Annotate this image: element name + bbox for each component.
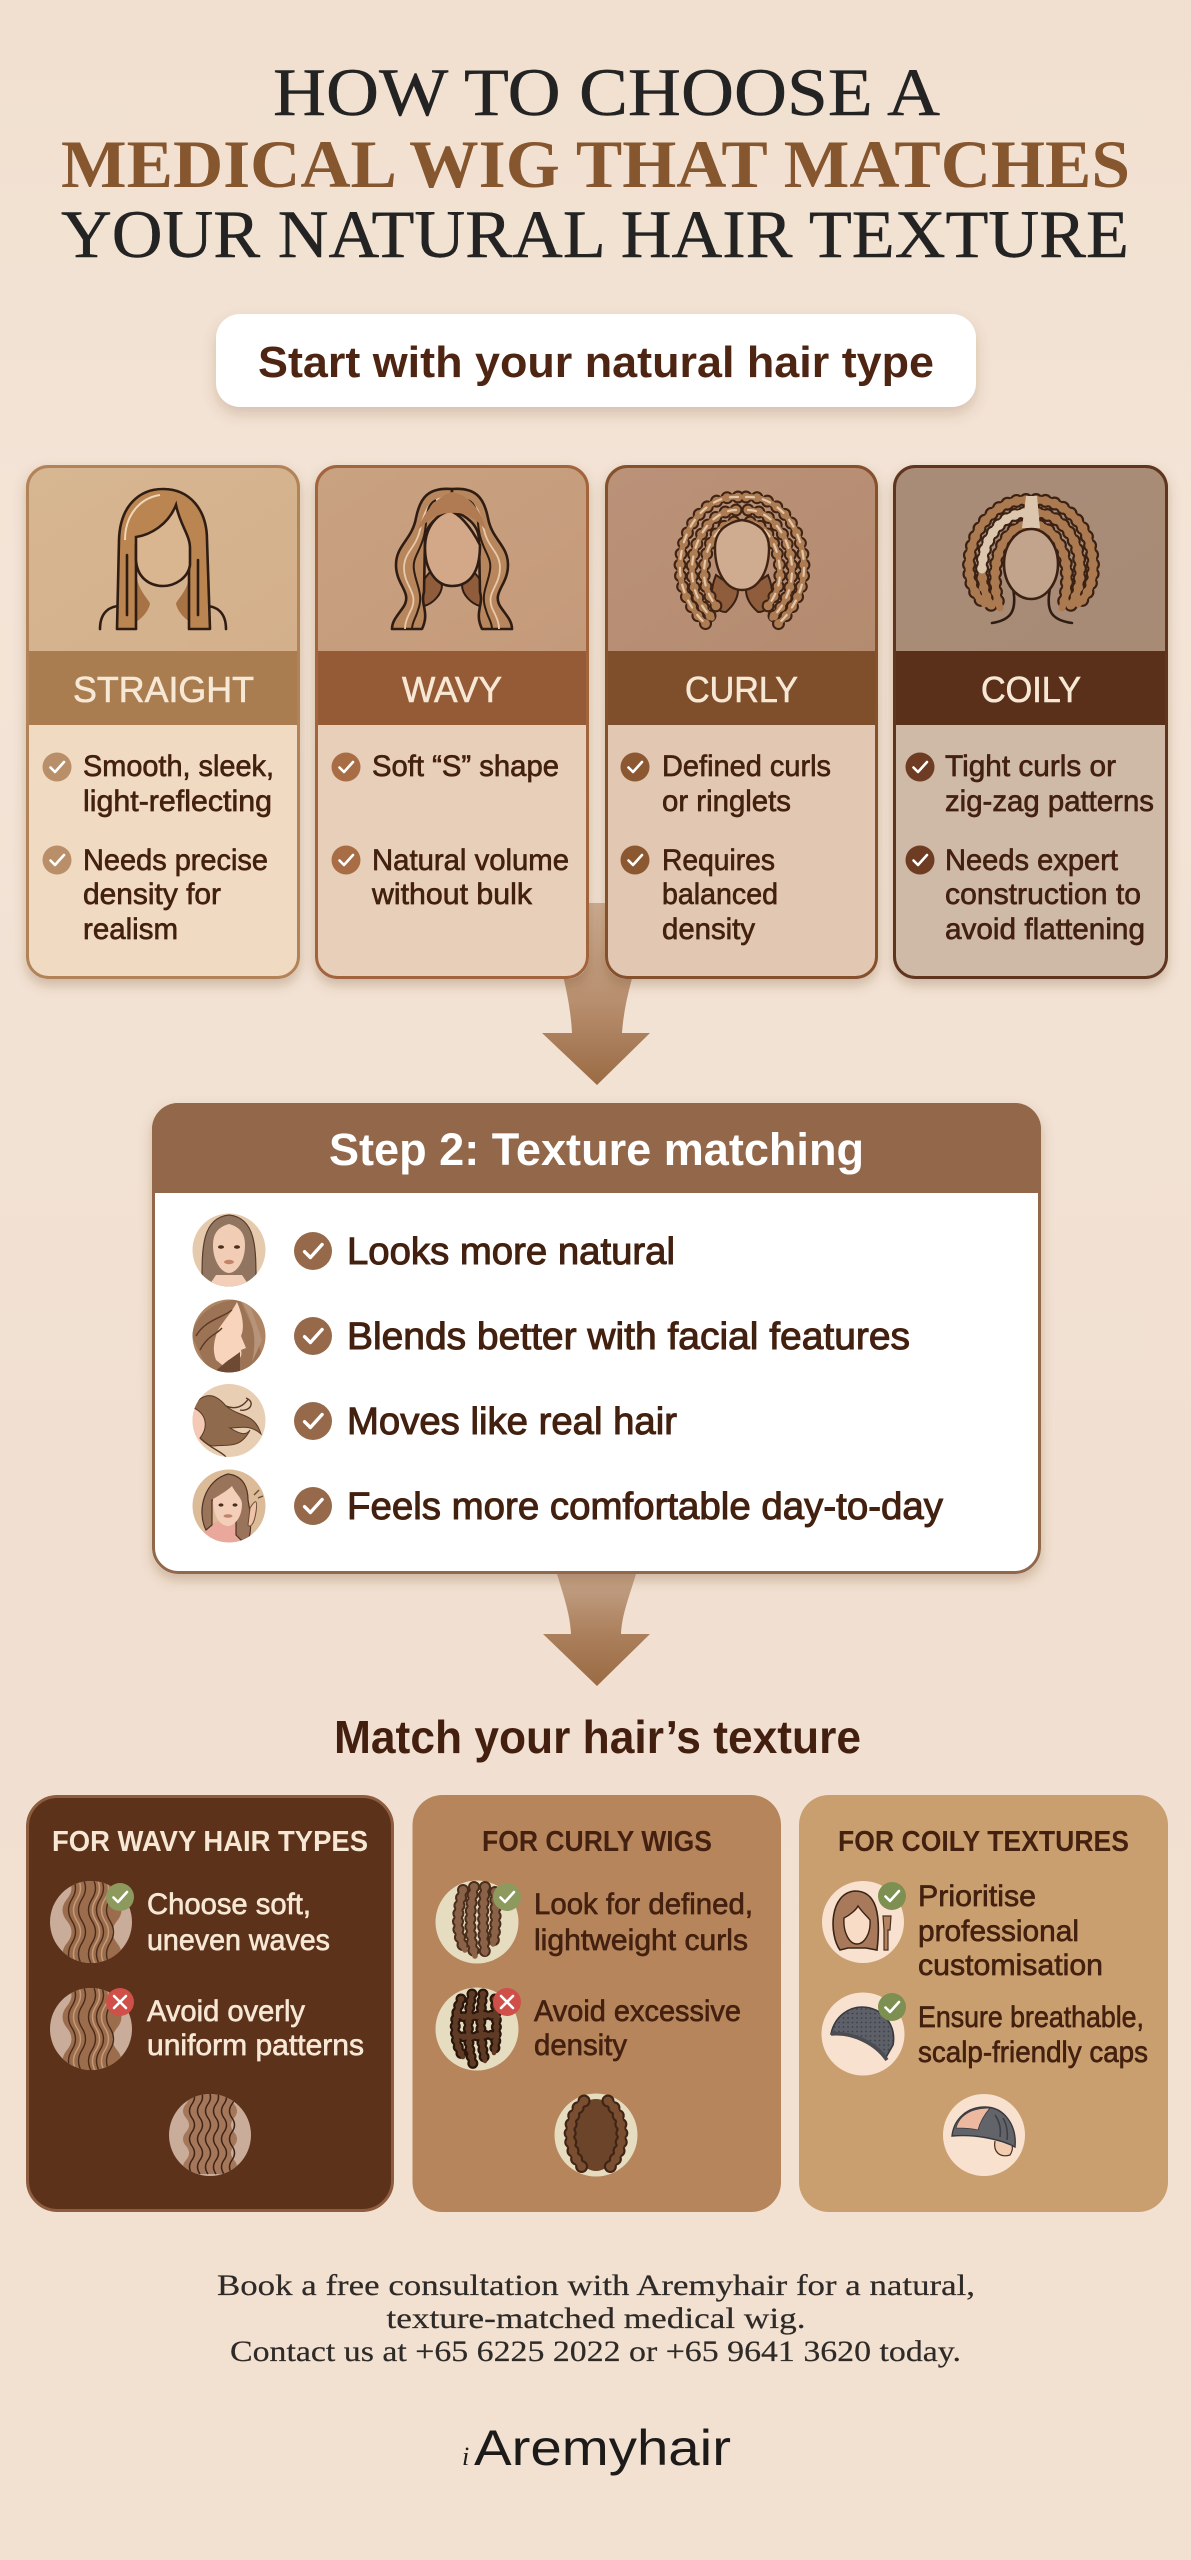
call to action text xyxy=(217,2269,975,2368)
text xyxy=(147,1888,330,1957)
step 2 heading: Step 2: Texture matching xyxy=(329,1124,864,1175)
text: professional xyxy=(918,1915,1079,1948)
icon: defined curls xyxy=(436,1880,518,1964)
text: Avoid overly xyxy=(147,1995,305,2028)
panel: step 2 texture matching xyxy=(152,1103,1041,1574)
text xyxy=(147,1995,364,2062)
badge: cross xyxy=(493,1988,521,2016)
tip: defined curls xyxy=(436,1880,753,1964)
label: wavy: WAVY xyxy=(402,669,502,710)
row: feels comfortable xyxy=(192,1470,943,1545)
badge: check xyxy=(493,1883,521,1911)
tip: avoid density xyxy=(436,1988,741,2070)
check xyxy=(294,1487,332,1525)
title xyxy=(61,54,1130,272)
list: curly: Requires xyxy=(662,844,775,877)
panel: for wavy hair types xyxy=(28,1796,392,2210)
list: straight: Needs precise xyxy=(83,844,268,877)
call to action text: Book a free consultation with Aremyhair for a natural, xyxy=(217,2269,975,2302)
text: scalp-friendly caps xyxy=(918,2036,1148,2069)
list: wavy: without bulk xyxy=(371,878,533,911)
logo: Aremyhair: i xyxy=(462,2442,469,2471)
heading: match your hair's texture: Match your hair’s texture xyxy=(334,1711,861,1763)
text: density xyxy=(534,2029,627,2062)
text: Choose soft, xyxy=(147,1888,311,1921)
text: Avoid excessive xyxy=(534,1995,741,2028)
list: curly xyxy=(620,750,831,946)
list: wavy: Natural volume xyxy=(372,844,569,877)
title: MEDICAL WIG THAT MATCHES xyxy=(61,126,1130,202)
list: curly: density xyxy=(662,913,755,946)
text: lightweight curls xyxy=(534,1924,748,1957)
panel: for coily textures xyxy=(799,1795,1168,2212)
tip: choose soft waves xyxy=(50,1877,330,1965)
label: curly: CURLY xyxy=(685,669,798,710)
icon: wavy hair xyxy=(392,489,512,629)
panel: coily xyxy=(893,465,1168,979)
list: wavy xyxy=(332,750,569,911)
check xyxy=(294,1317,332,1355)
icon: dense curls xyxy=(436,1988,518,2070)
tip: customisation xyxy=(822,1880,1103,1982)
list: straight: density for xyxy=(83,878,221,911)
icon: mesh cap xyxy=(822,1992,904,2076)
icon: curly hair xyxy=(680,497,804,624)
icon: avatar touching hair xyxy=(192,1470,266,1545)
logo: Aremyhair: Aremyhair xyxy=(474,2420,731,2476)
badge: cross xyxy=(106,1988,134,2016)
icon: wig and comb xyxy=(822,1881,904,1963)
panel: straight xyxy=(26,465,300,979)
text: Feels more comfortable day-to-day xyxy=(347,1486,943,1528)
list: curly: or ringlets xyxy=(662,785,791,818)
text: Moves like real hair xyxy=(347,1401,677,1443)
icon: soft waves xyxy=(50,1877,132,1965)
list: straight: Smooth, sleek, xyxy=(83,750,274,783)
arrow: step 2 to match xyxy=(543,1574,650,1686)
list: coily: construction to xyxy=(945,878,1141,911)
row: looks more natural xyxy=(192,1214,675,1290)
list: coily: Tight curls or xyxy=(945,750,1116,783)
text: Looks more natural xyxy=(347,1231,675,1273)
list: straight xyxy=(42,750,274,946)
badge: check xyxy=(878,1993,906,2021)
text: uneven waves xyxy=(147,1924,330,1957)
text xyxy=(918,1880,1103,1982)
badge: check xyxy=(878,1882,906,1910)
icon: hair-knotted cap xyxy=(943,2094,1025,2176)
text: Prioritise xyxy=(918,1880,1036,1913)
list: curly: Defined curls xyxy=(662,750,831,783)
icon: curl swatch xyxy=(554,2094,638,2176)
panel: wavy xyxy=(315,465,589,979)
panel title: FOR COILY TEXTURES xyxy=(838,1826,1129,1858)
text: customisation xyxy=(918,1949,1103,1982)
icon: avatar profile xyxy=(192,1300,266,1375)
list: curly: balanced xyxy=(662,878,778,911)
text xyxy=(534,1888,753,1957)
icon: straight hair xyxy=(100,489,226,629)
list: coily: Needs expert xyxy=(945,844,1119,877)
list: straight: light-reflecting xyxy=(83,785,272,818)
call to action text: texture-matched medical wig. xyxy=(386,2302,806,2335)
list: wavy: Soft “S” shape xyxy=(372,750,559,783)
text: Look for defined, xyxy=(534,1888,753,1921)
icon: avatar flowing hair xyxy=(192,1384,266,1457)
text xyxy=(918,2001,1148,2069)
icon: coily hair xyxy=(969,496,1093,623)
text: uniform patterns xyxy=(147,2029,364,2062)
arrow: hair type to step 2 xyxy=(542,903,650,1085)
start heading pill: Start with your natural hair type xyxy=(258,338,934,387)
badge: check xyxy=(106,1883,134,1911)
tip: breathable caps xyxy=(822,1992,1148,2076)
icon: uniform waves xyxy=(50,1984,132,2072)
call to action text: Contact us at +65 6225 2022 or +65 9641 3620 today. xyxy=(230,2335,961,2368)
panel title: FOR WAVY HAIR TYPES xyxy=(52,1826,368,1858)
panel title: FOR CURLY WIGS xyxy=(482,1826,712,1858)
panel: for curly wigs xyxy=(412,1795,781,2212)
icon: wave swatch xyxy=(169,2090,251,2176)
title: YOUR NATURAL HAIR TEXTURE xyxy=(61,196,1129,272)
row: blends better xyxy=(192,1300,910,1375)
check xyxy=(294,1232,332,1270)
label: coily: COILY xyxy=(981,669,1081,710)
icon: avatar front face xyxy=(192,1214,266,1290)
text: Ensure breathable, xyxy=(918,2001,1144,2034)
title: HOW TO CHOOSE A xyxy=(273,54,940,130)
tip: avoid uniform patterns xyxy=(50,1984,364,2072)
text: Blends better with facial features xyxy=(347,1316,910,1358)
list: coily xyxy=(906,750,1154,946)
label: straight: STRAIGHT xyxy=(73,669,254,710)
row: moves like real hair xyxy=(179,1384,677,1457)
panel: curly xyxy=(605,465,878,979)
check xyxy=(294,1402,332,1440)
list: coily: avoid flattening xyxy=(945,913,1145,946)
list: coily: zig-zag patterns xyxy=(945,785,1154,818)
text xyxy=(534,1995,741,2062)
start heading pill xyxy=(216,314,976,407)
list: straight: realism xyxy=(83,913,178,946)
